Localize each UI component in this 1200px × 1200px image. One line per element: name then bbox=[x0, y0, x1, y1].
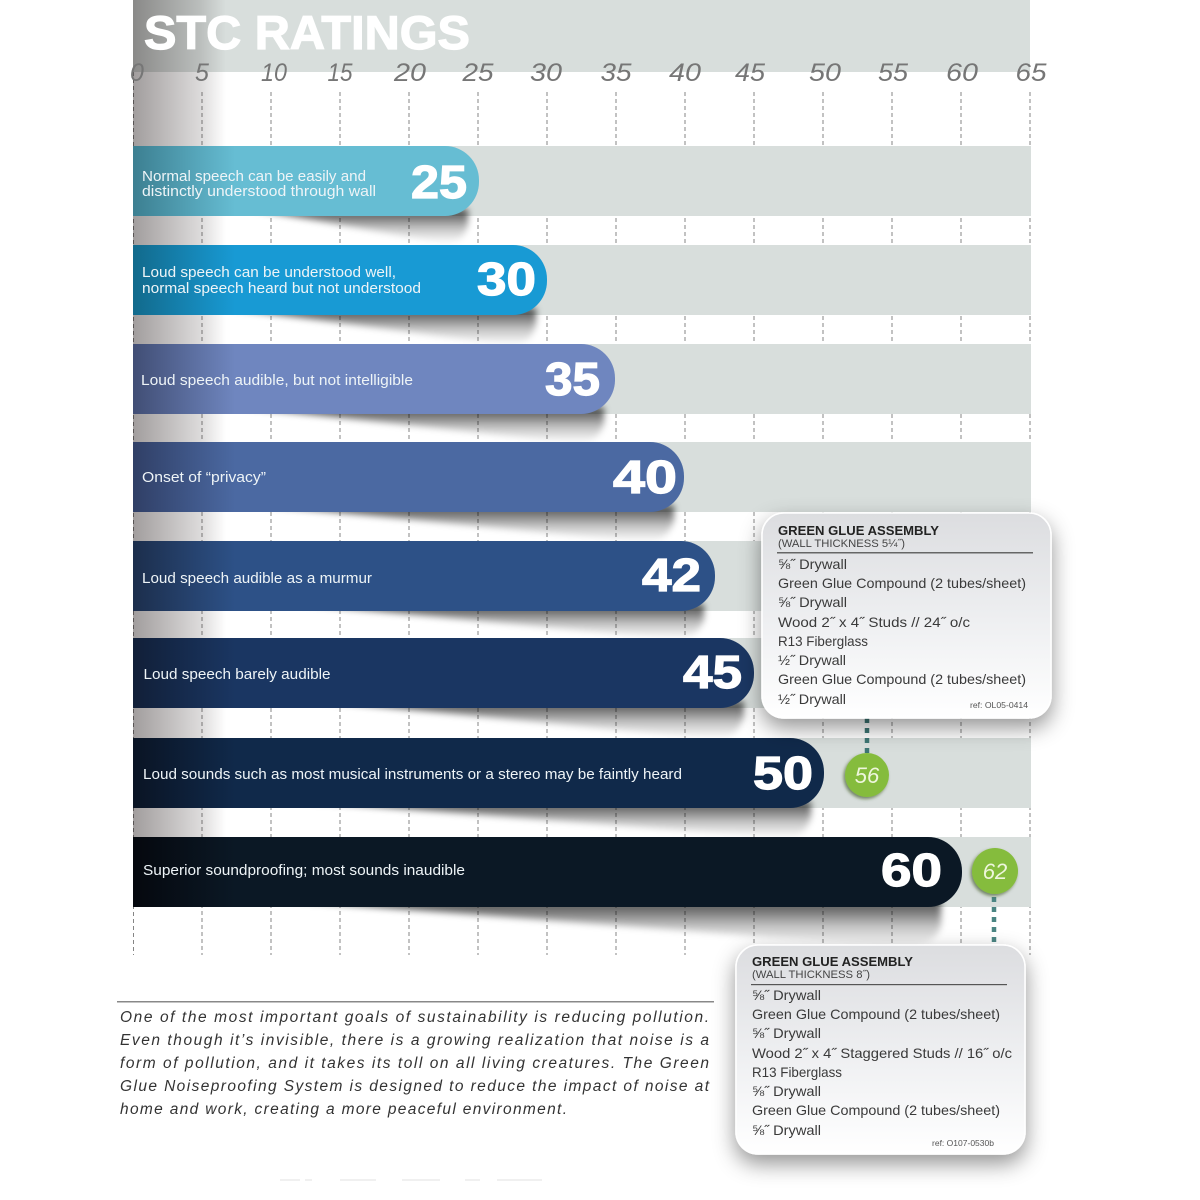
axis scale labels: 35 bbox=[600, 59, 632, 87]
card: Green Glue assembly 8 inch: R13 Fiberglass bbox=[752, 1064, 842, 1080]
axis scale labels: 40 bbox=[669, 59, 701, 87]
bar: STC 50 bbox=[133, 738, 824, 808]
card: Green Glue assembly 8 inch bbox=[736, 945, 1025, 1154]
card: Green Glue assembly 8 inch: ⅝˝ Drywall bbox=[752, 987, 821, 1003]
card: Green Glue assembly 5¼ inch: R13 Fiberglass bbox=[778, 633, 868, 649]
bar: STC 40 bbox=[133, 442, 684, 512]
bar: STC 60: Superior soundproofing; most sounds inaudible bbox=[143, 862, 465, 879]
bar: STC 40: 40 bbox=[613, 451, 677, 503]
marker: Green Glue 56 bbox=[845, 753, 889, 797]
bar: STC 45: 45 bbox=[683, 646, 742, 698]
card: Green Glue assembly 8 inch: GREEN GLUE ASSEMBLY bbox=[752, 954, 913, 969]
sustainability paragraph: form of pollution, and it takes its toll on all living creatures. The Green bbox=[120, 1055, 709, 1072]
card: Green Glue assembly 5¼ inch: ½˝ Drywall bbox=[778, 652, 846, 668]
axis scale labels: 20 bbox=[393, 59, 426, 87]
bar: STC 42 bbox=[133, 541, 715, 611]
card: Green Glue assembly 8 inch: Wood 2˝ x 4˝ Staggered Studs // 16˝ o/c bbox=[752, 1045, 1012, 1061]
bar: STC 60 bbox=[133, 837, 962, 907]
axis scale labels: 55 bbox=[878, 59, 908, 87]
marker: Green Glue 62: 62 bbox=[983, 859, 1007, 884]
card: Green Glue assembly 8 inch: ⅝˝ Drywall bbox=[752, 1122, 821, 1138]
card: Green Glue assembly 5¼ inch: ⅝˝ Drywall bbox=[778, 556, 847, 572]
bar: STC 30: normal speech heard but not understood bbox=[142, 280, 421, 297]
bar: STC 42: 42 bbox=[642, 549, 701, 601]
card: Green Glue assembly 5¼ inch: Green Glue Compound (2 tubes/sheet) bbox=[778, 671, 1026, 687]
card: Green Glue assembly 8 inch: ref: O107-0530b bbox=[932, 1139, 995, 1148]
card: Green Glue assembly 5¼ inch: GREEN GLUE ASSEMBLY bbox=[778, 523, 939, 538]
axis scale labels: 25 bbox=[461, 59, 494, 87]
card: Green Glue assembly 8 inch: ⅝˝ Drywall bbox=[752, 1025, 821, 1041]
card: Green Glue assembly 5¼ inch: ref: OL05-0414 bbox=[970, 701, 1029, 710]
sustainability paragraph: Glue Noiseproofing System is designed to reduce the impact of noise at bbox=[120, 1078, 710, 1095]
connector: 62 to lower card bbox=[992, 897, 996, 944]
left edge shading bbox=[133, 0, 226, 837]
axis scale labels: 60 bbox=[946, 59, 978, 87]
bar: STC 25: Normal speech can be easily and bbox=[142, 168, 366, 185]
row background bands bbox=[133, 146, 1031, 907]
axis scale labels: 65 bbox=[1016, 59, 1047, 87]
card: Green Glue assembly 8 inch: Green Glue Compound (2 tubes/sheet) bbox=[752, 1006, 1000, 1022]
sustainability paragraph: home and work, creating a more peaceful environment. bbox=[120, 1101, 567, 1118]
marker: Green Glue 62 bbox=[972, 848, 1018, 894]
title: STC RATINGS bbox=[144, 6, 470, 59]
bar: STC 25 bbox=[133, 146, 479, 216]
axis scale labels: 5 bbox=[195, 59, 209, 87]
marker: Green Glue 56: 56 bbox=[855, 763, 880, 788]
bar: STC 40: Onset of “privacy” bbox=[142, 469, 266, 486]
bar: STC 35: 35 bbox=[545, 353, 600, 405]
card: Green Glue assembly 5¼ inch bbox=[762, 513, 1051, 718]
card: Green Glue assembly 5¼ inch: ½˝ Drywall bbox=[778, 691, 846, 707]
axis scale labels: 15 bbox=[328, 59, 353, 87]
bar: STC 35 bbox=[133, 344, 615, 414]
bar: STC 25: 25 bbox=[411, 156, 467, 208]
bar: STC 42: Loud speech audible as a murmur bbox=[142, 570, 372, 587]
bar: STC 45: Loud speech barely audible bbox=[144, 666, 330, 683]
bar: STC 45 bbox=[133, 638, 754, 708]
sustainability paragraph bbox=[117, 1001, 714, 1118]
sustainability paragraph: Even though it’s invisible, there is a growing realization that noise is a bbox=[120, 1032, 709, 1049]
card: Green Glue assembly 8 inch: Green Glue Compound (2 tubes/sheet) bbox=[752, 1102, 1000, 1118]
card: Green Glue assembly 5¼ inch: Wood 2˝ x 4˝ Studs // 24˝ o/c bbox=[778, 614, 970, 630]
connector: 56 to upper card bbox=[865, 718, 869, 755]
card: Green Glue assembly 5¼ inch: (WALL THICKNESS 5¼˝) bbox=[778, 538, 905, 550]
bar: STC 25: distinctly understood through wall bbox=[142, 183, 376, 200]
bar: STC 50: 50 bbox=[753, 747, 813, 799]
axis scale labels: 45 bbox=[735, 59, 765, 87]
axis scale labels: 0 bbox=[130, 59, 144, 87]
bar: STC 30 bbox=[133, 245, 547, 315]
bar: STC 30: Loud speech can be understood well, bbox=[142, 264, 396, 281]
bar drop shadows bbox=[225, 209, 941, 947]
card: Green Glue assembly 8 inch: ⅝˝ Drywall bbox=[752, 1083, 821, 1099]
card: Green Glue assembly 5¼ inch: Green Glue Compound (2 tubes/sheet) bbox=[778, 575, 1026, 591]
axis scale labels bbox=[130, 59, 1047, 87]
axis scale labels: 30 bbox=[530, 59, 562, 87]
header band bbox=[133, 0, 1030, 72]
card: Green Glue assembly 5¼ inch: ⅝˝ Drywall bbox=[778, 594, 847, 610]
bar: STC 35: Loud speech audible, but not intelligible bbox=[141, 372, 413, 389]
axis scale labels: 50 bbox=[809, 59, 841, 87]
axis scale labels: 10 bbox=[261, 59, 287, 87]
bar: STC 60: 60 bbox=[881, 844, 942, 896]
sustainability paragraph: One of the most important goals of sustainability is reducing pollution. bbox=[120, 1009, 709, 1026]
bar: STC 30: 30 bbox=[477, 253, 536, 305]
card: Green Glue assembly 8 inch: (WALL THICKNESS 8˝) bbox=[752, 969, 870, 981]
chart grid lines bbox=[134, 72, 1030, 955]
bar: STC 50: Loud sounds such as most musical instruments or a stereo may be faintly heard bbox=[143, 766, 682, 783]
